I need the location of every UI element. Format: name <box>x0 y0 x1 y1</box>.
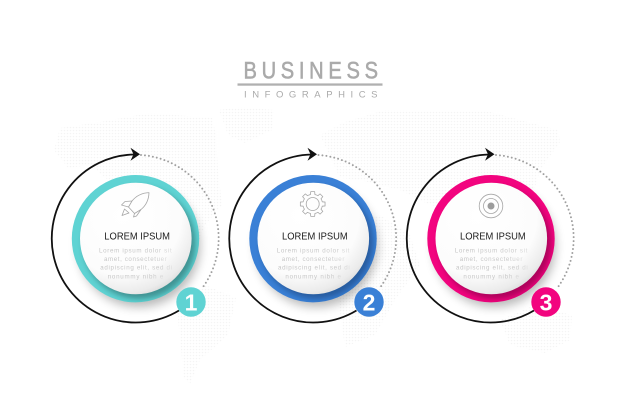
arrow head <box>130 148 140 161</box>
title underline <box>238 83 382 86</box>
ring inner shadow <box>84 187 196 299</box>
body text: adipiscing elit, sed di <box>100 265 172 272</box>
black arc <box>229 154 356 322</box>
title <box>238 56 382 101</box>
dotted arc <box>318 155 396 289</box>
black arc <box>407 154 534 322</box>
arrow head <box>485 148 494 161</box>
panel: step 2 <box>229 148 396 322</box>
white disc <box>80 183 192 294</box>
body text: nonummy nibh e <box>108 274 164 280</box>
ring drop shadow <box>256 185 378 307</box>
body text <box>99 247 172 280</box>
label: LOREM IPSUM <box>104 231 170 242</box>
icon: gear <box>300 192 325 216</box>
body text: Lorem ipsum dolor sit <box>99 247 172 254</box>
icon: target <box>479 194 503 218</box>
body text: amet, consectetuer <box>460 256 522 263</box>
ring drop shadow <box>434 185 556 307</box>
label: LOREM IPSUM <box>460 231 526 242</box>
number badge <box>176 287 206 317</box>
black arc <box>52 154 179 322</box>
number 2: 2 <box>363 290 375 316</box>
white disc <box>436 183 547 294</box>
ring inner shadow <box>439 187 551 299</box>
ring <box>249 175 377 302</box>
subheading: infographics: INFOGRAPHICS <box>244 90 378 101</box>
dotted arc <box>496 155 574 289</box>
body text <box>277 247 350 280</box>
icon: rocket <box>122 193 149 217</box>
arrow head <box>308 148 317 161</box>
body text: nonummy nibh e <box>285 274 342 280</box>
number 3: 3 <box>540 290 552 316</box>
dotted arc <box>141 155 219 289</box>
number 1: 1 <box>185 290 198 316</box>
ring <box>427 175 555 302</box>
number badge <box>354 287 384 317</box>
ring inner shadow <box>261 187 373 299</box>
body text: amet, consectetuer <box>282 256 344 263</box>
dotted world map <box>54 107 572 384</box>
body text: nonummy nibh e <box>463 274 520 280</box>
panel: step 3 <box>407 148 574 322</box>
body text <box>455 247 528 280</box>
white disc <box>258 183 369 294</box>
body text: Lorem ipsum dolor sit <box>277 247 350 254</box>
label: LOREM IPSUM <box>282 231 348 242</box>
panel: step 1 <box>52 148 219 322</box>
body text: amet, consectetuer <box>104 256 167 263</box>
body text: Lorem ipsum dolor sit <box>455 247 528 254</box>
number badge <box>531 287 561 317</box>
ring <box>72 175 199 302</box>
body text: adipiscing elit, sed di <box>456 265 528 272</box>
body text: adipiscing elit, sed di <box>278 265 350 272</box>
heading: business: BUSINESS <box>244 56 378 84</box>
ring drop shadow <box>78 185 200 307</box>
